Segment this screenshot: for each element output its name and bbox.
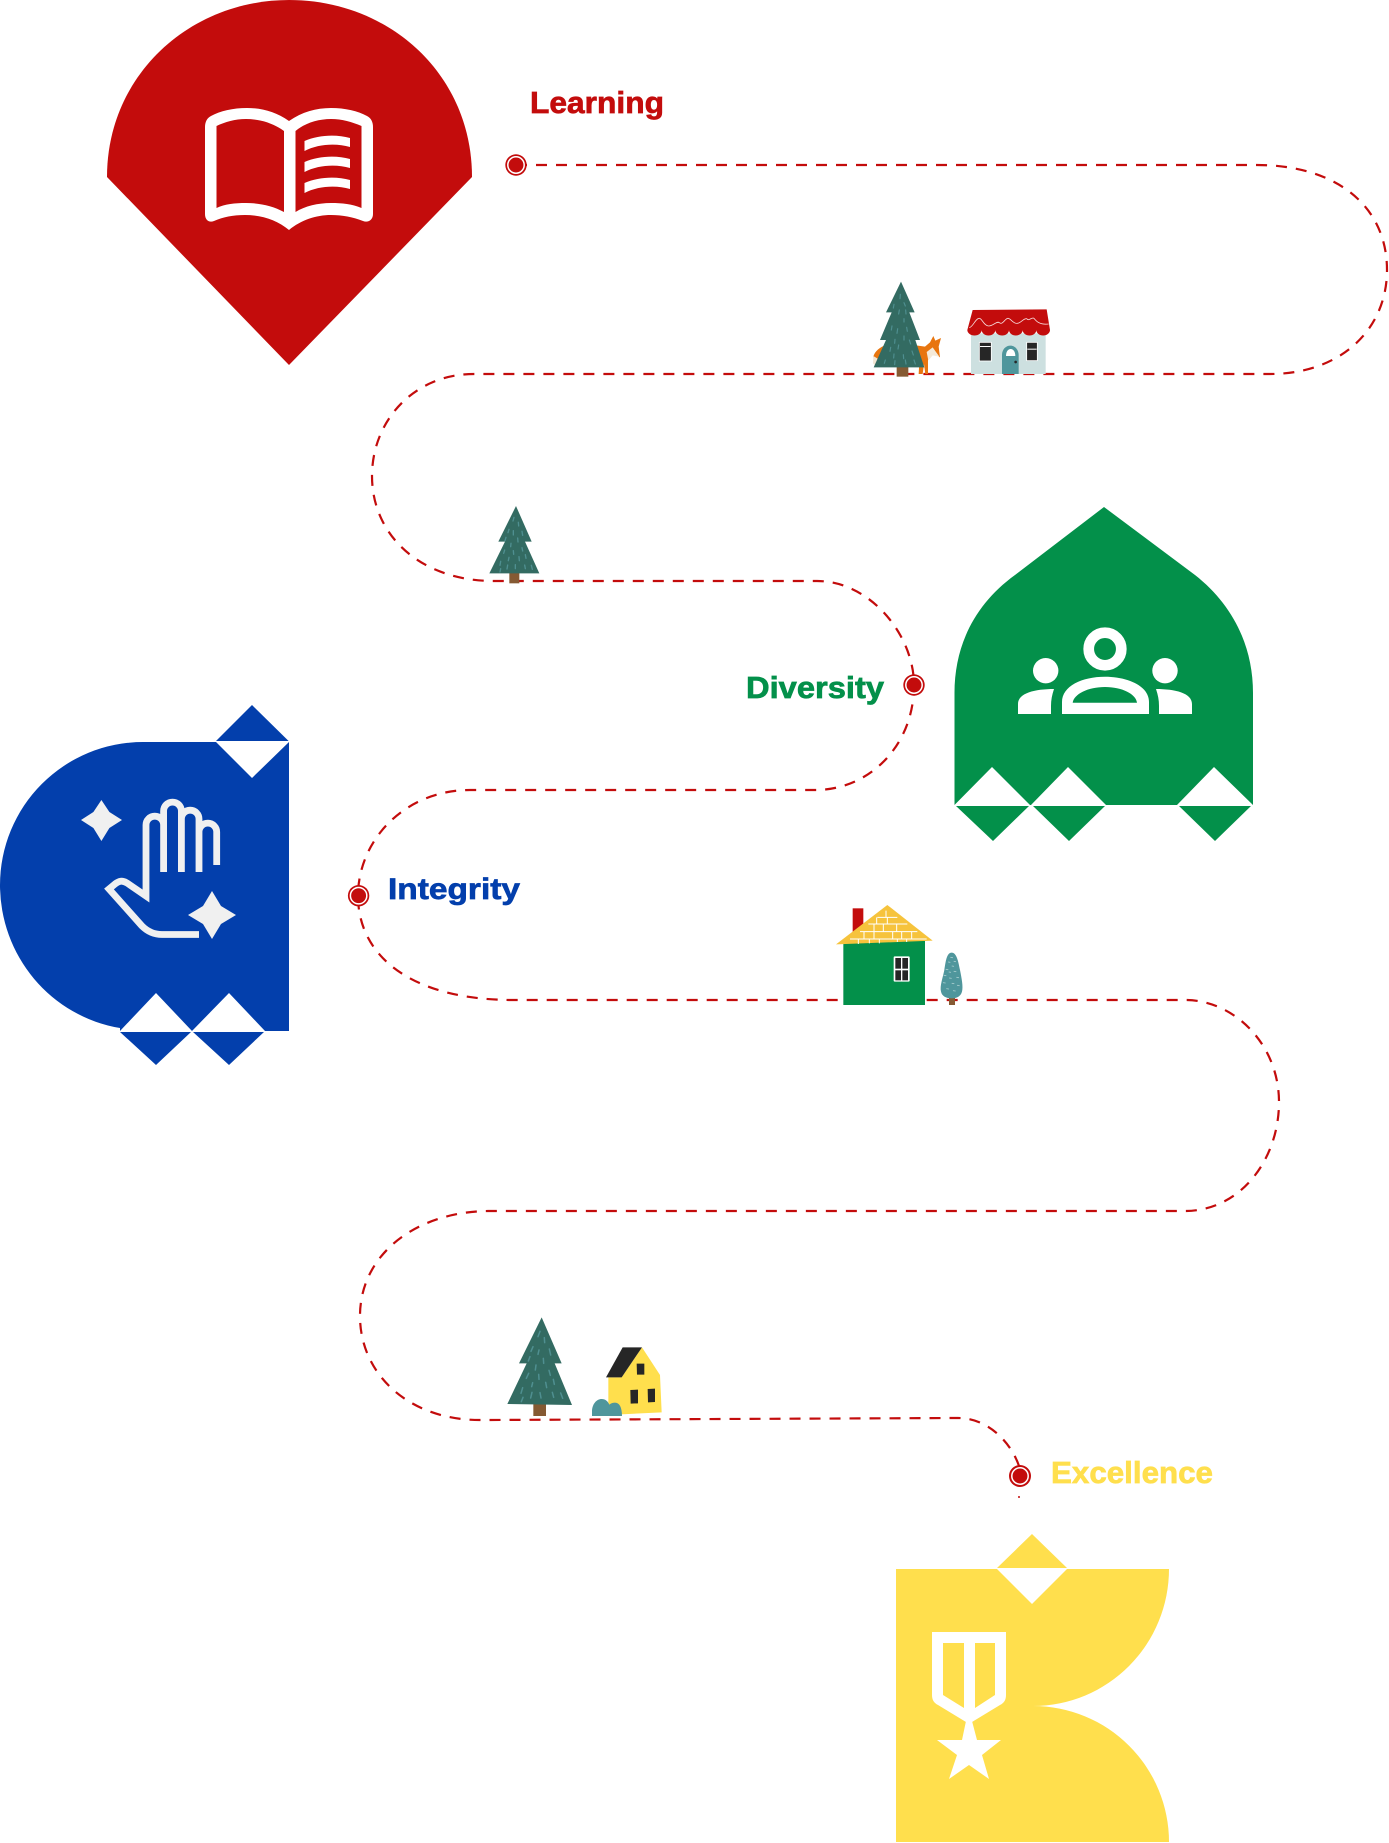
icon: group of people: [1018, 633, 1192, 714]
red pin shape: [107, 0, 472, 365]
roof: [836, 905, 933, 944]
illustration: pine tree and yellow house: [507, 1317, 662, 1416]
blue shape: [0, 742, 289, 1031]
teal tree: [941, 953, 962, 1005]
top diamond upper triangle: [216, 705, 289, 741]
top diamond upper triangle: [997, 1534, 1067, 1568]
dashed winding road: [358, 165, 1387, 1498]
node: learning start: [505, 154, 527, 176]
chimney: [853, 908, 863, 932]
icon: raised hand with sparkles: [81, 800, 236, 939]
heading: Excellence: Excellence: [1051, 1455, 1213, 1490]
illustration: pine tree, fox and red-roof cottage: [873, 282, 1050, 377]
node: excellence: [1009, 1465, 1031, 1487]
yellow shape: [896, 1569, 1169, 1842]
panel: excellence shape: [896, 1534, 1169, 1842]
white triangles and green triangles: [954, 767, 1253, 841]
cottage: [967, 309, 1050, 374]
window: [894, 956, 910, 982]
illustration: green house and teal tree: [836, 905, 962, 1005]
icon: medal: [932, 1632, 1006, 1779]
heading: Learning: Learning: [530, 85, 664, 120]
fox: [873, 336, 941, 374]
tree: [874, 282, 924, 377]
panel: integrity shape: [0, 705, 289, 1065]
node: integrity: [348, 885, 369, 906]
green house shape: [954, 507, 1253, 805]
illustration: small pine tree: [489, 506, 539, 583]
wall: [843, 941, 925, 1005]
bottom diamonds: [120, 993, 265, 1065]
tree: [507, 1317, 572, 1416]
icon: open book: [205, 108, 373, 230]
yellow house: [606, 1347, 662, 1415]
panel: learning pin: [107, 0, 472, 365]
panel: diversity shape: [954, 507, 1253, 841]
heading: Diversity: Diversity: [746, 670, 885, 705]
node: diversity: [903, 674, 925, 696]
teal bush: [592, 1399, 622, 1416]
heading: Integrity: Integrity: [388, 873, 520, 906]
